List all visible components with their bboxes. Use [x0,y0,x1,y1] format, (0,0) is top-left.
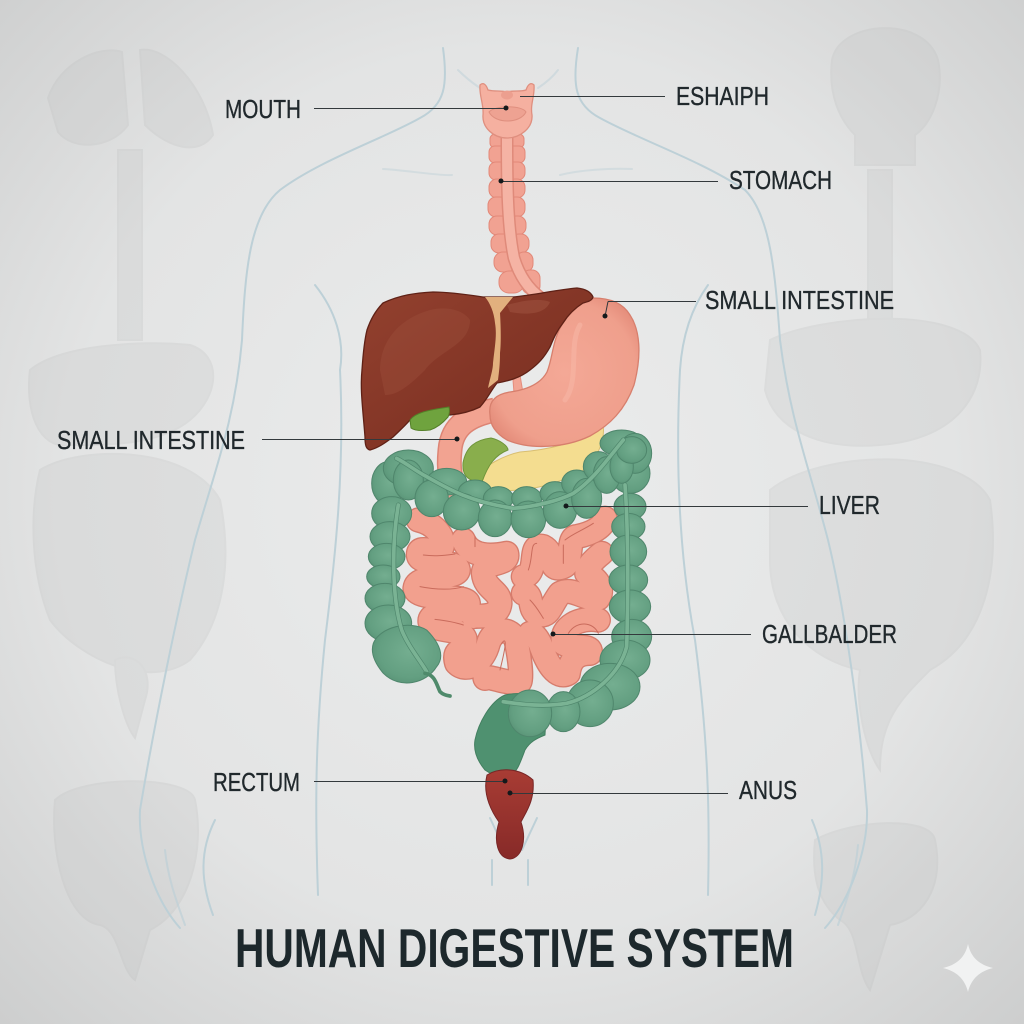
duodenum [449,410,495,492]
gallbladder [410,407,449,431]
appendix [425,673,450,696]
label: liver: LIVER [819,490,880,520]
rectum and anus [486,770,533,859]
body outline [140,48,867,928]
label: rectum: RECTUM [213,767,300,797]
lower green organ [463,438,508,482]
leader lines [262,96,808,794]
title: HUMAN DIGESTIVE SYSTEM [235,917,794,979]
right descending colon [508,453,652,737]
small intestine [415,518,605,682]
esophagus [488,134,541,393]
left ascending colon [365,462,441,683]
label: eshaiph: ESHAIPH [676,81,769,111]
colon bands [394,440,628,705]
pancreas [470,425,603,491]
large intestine [365,430,652,776]
label: gallbalder: GALLBALDER [762,619,897,649]
mouth and throat [480,84,534,138]
label: mouth: MOUTH [225,94,301,124]
leader dots [454,106,608,796]
liver [361,288,593,450]
label: stomach: STOMACH [729,165,832,195]
transverse colon back row [383,430,652,510]
sigmoid colon [475,694,546,776]
icon: sparkle [943,944,993,992]
stomach [490,298,639,446]
transverse colon front row [393,437,647,538]
ghost anatomy: right side [765,28,993,990]
label: small intestine right: SMALL INTESTINE [705,285,894,315]
ghost anatomy: left side [29,50,225,980]
label: small intestine left: SMALL INTESTINE [57,425,245,455]
label: anus: ANUS [739,775,797,805]
